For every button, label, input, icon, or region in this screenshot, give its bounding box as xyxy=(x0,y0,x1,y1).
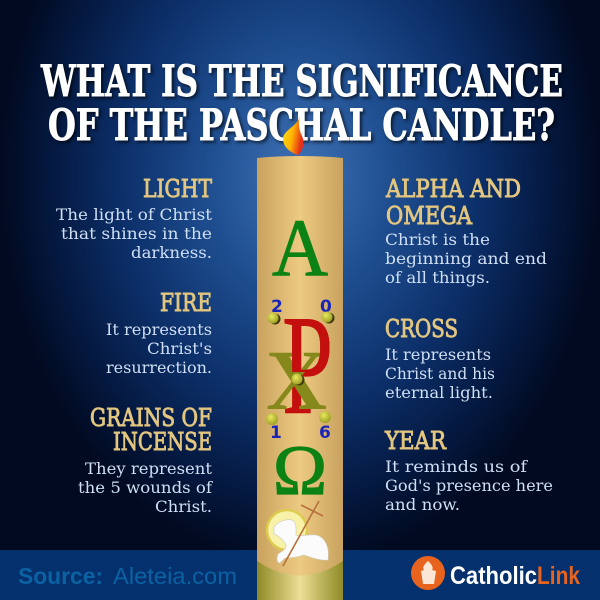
chi rho monogram: P xyxy=(282,286,333,444)
source credit: Aleteia.com xyxy=(113,563,237,589)
panel: year xyxy=(384,426,553,514)
heading: OMEGA xyxy=(386,201,472,230)
omega letter: Ω xyxy=(273,432,327,510)
footer band xyxy=(0,550,600,600)
source credit xyxy=(18,563,237,589)
text block: It represents xyxy=(385,346,491,364)
chi rho monogram: X xyxy=(266,332,327,428)
text block: of all things. xyxy=(385,269,490,287)
heading: GRAINS OF xyxy=(90,403,212,432)
candle body xyxy=(257,156,343,600)
source credit: Source: xyxy=(18,563,103,589)
text block: beginning and end xyxy=(385,250,547,268)
icon: flame xyxy=(283,116,303,155)
logo wordmark: Catholic xyxy=(450,562,537,590)
text block: Christ. xyxy=(155,498,212,516)
text block: that shines in the xyxy=(61,225,212,243)
heading: ALPHA AND xyxy=(385,174,521,203)
year numerals: 2 xyxy=(271,297,283,317)
panel: light xyxy=(56,174,213,262)
text block xyxy=(78,460,213,516)
text block xyxy=(385,231,547,287)
text block: It reminds us of xyxy=(385,458,528,476)
panel: fire xyxy=(106,288,212,377)
paschal candle xyxy=(257,116,343,600)
year numerals xyxy=(270,297,332,443)
text block xyxy=(106,321,212,377)
year numerals: 1 xyxy=(270,423,282,443)
text block: eternal light. xyxy=(385,384,493,402)
heading: FIRE xyxy=(160,288,212,317)
heading: YEAR xyxy=(384,426,447,455)
chi rho monogram: P xyxy=(282,286,333,444)
logo: CatholicLink xyxy=(411,556,580,590)
text block: God's presence here xyxy=(385,477,553,495)
heading: INCENSE xyxy=(113,427,212,456)
panel: cross xyxy=(385,314,495,402)
text block: They represent xyxy=(85,460,213,478)
text block xyxy=(385,458,553,514)
text block: and now. xyxy=(385,496,460,514)
text block: Christ's xyxy=(147,340,212,358)
text block xyxy=(385,346,495,402)
alpha letter: A xyxy=(272,202,328,293)
heading: LIGHT xyxy=(143,174,213,203)
heading: CROSS xyxy=(385,314,458,343)
panel: alpha and omega xyxy=(385,174,547,287)
text block: Christ is the xyxy=(385,231,490,249)
icon: lamb with cross and halo xyxy=(267,501,328,566)
text block: the 5 wounds of xyxy=(78,479,213,497)
incense grains xyxy=(266,312,334,425)
panel: grains of incense xyxy=(78,403,213,516)
heading xyxy=(90,403,212,456)
year numerals: 6 xyxy=(319,423,331,443)
text block: darkness. xyxy=(131,244,212,262)
year numerals: 0 xyxy=(320,297,332,317)
candle base band xyxy=(257,561,343,600)
text block: resurrection. xyxy=(106,359,212,377)
logo wordmark: Link xyxy=(537,562,580,590)
text block: Christ and his xyxy=(385,365,495,383)
icon: orange torch badge xyxy=(411,556,445,590)
text block xyxy=(56,206,213,262)
title xyxy=(40,57,563,151)
text block: It represents xyxy=(106,321,212,339)
text block: The light of Christ xyxy=(56,206,213,224)
heading xyxy=(385,174,521,230)
